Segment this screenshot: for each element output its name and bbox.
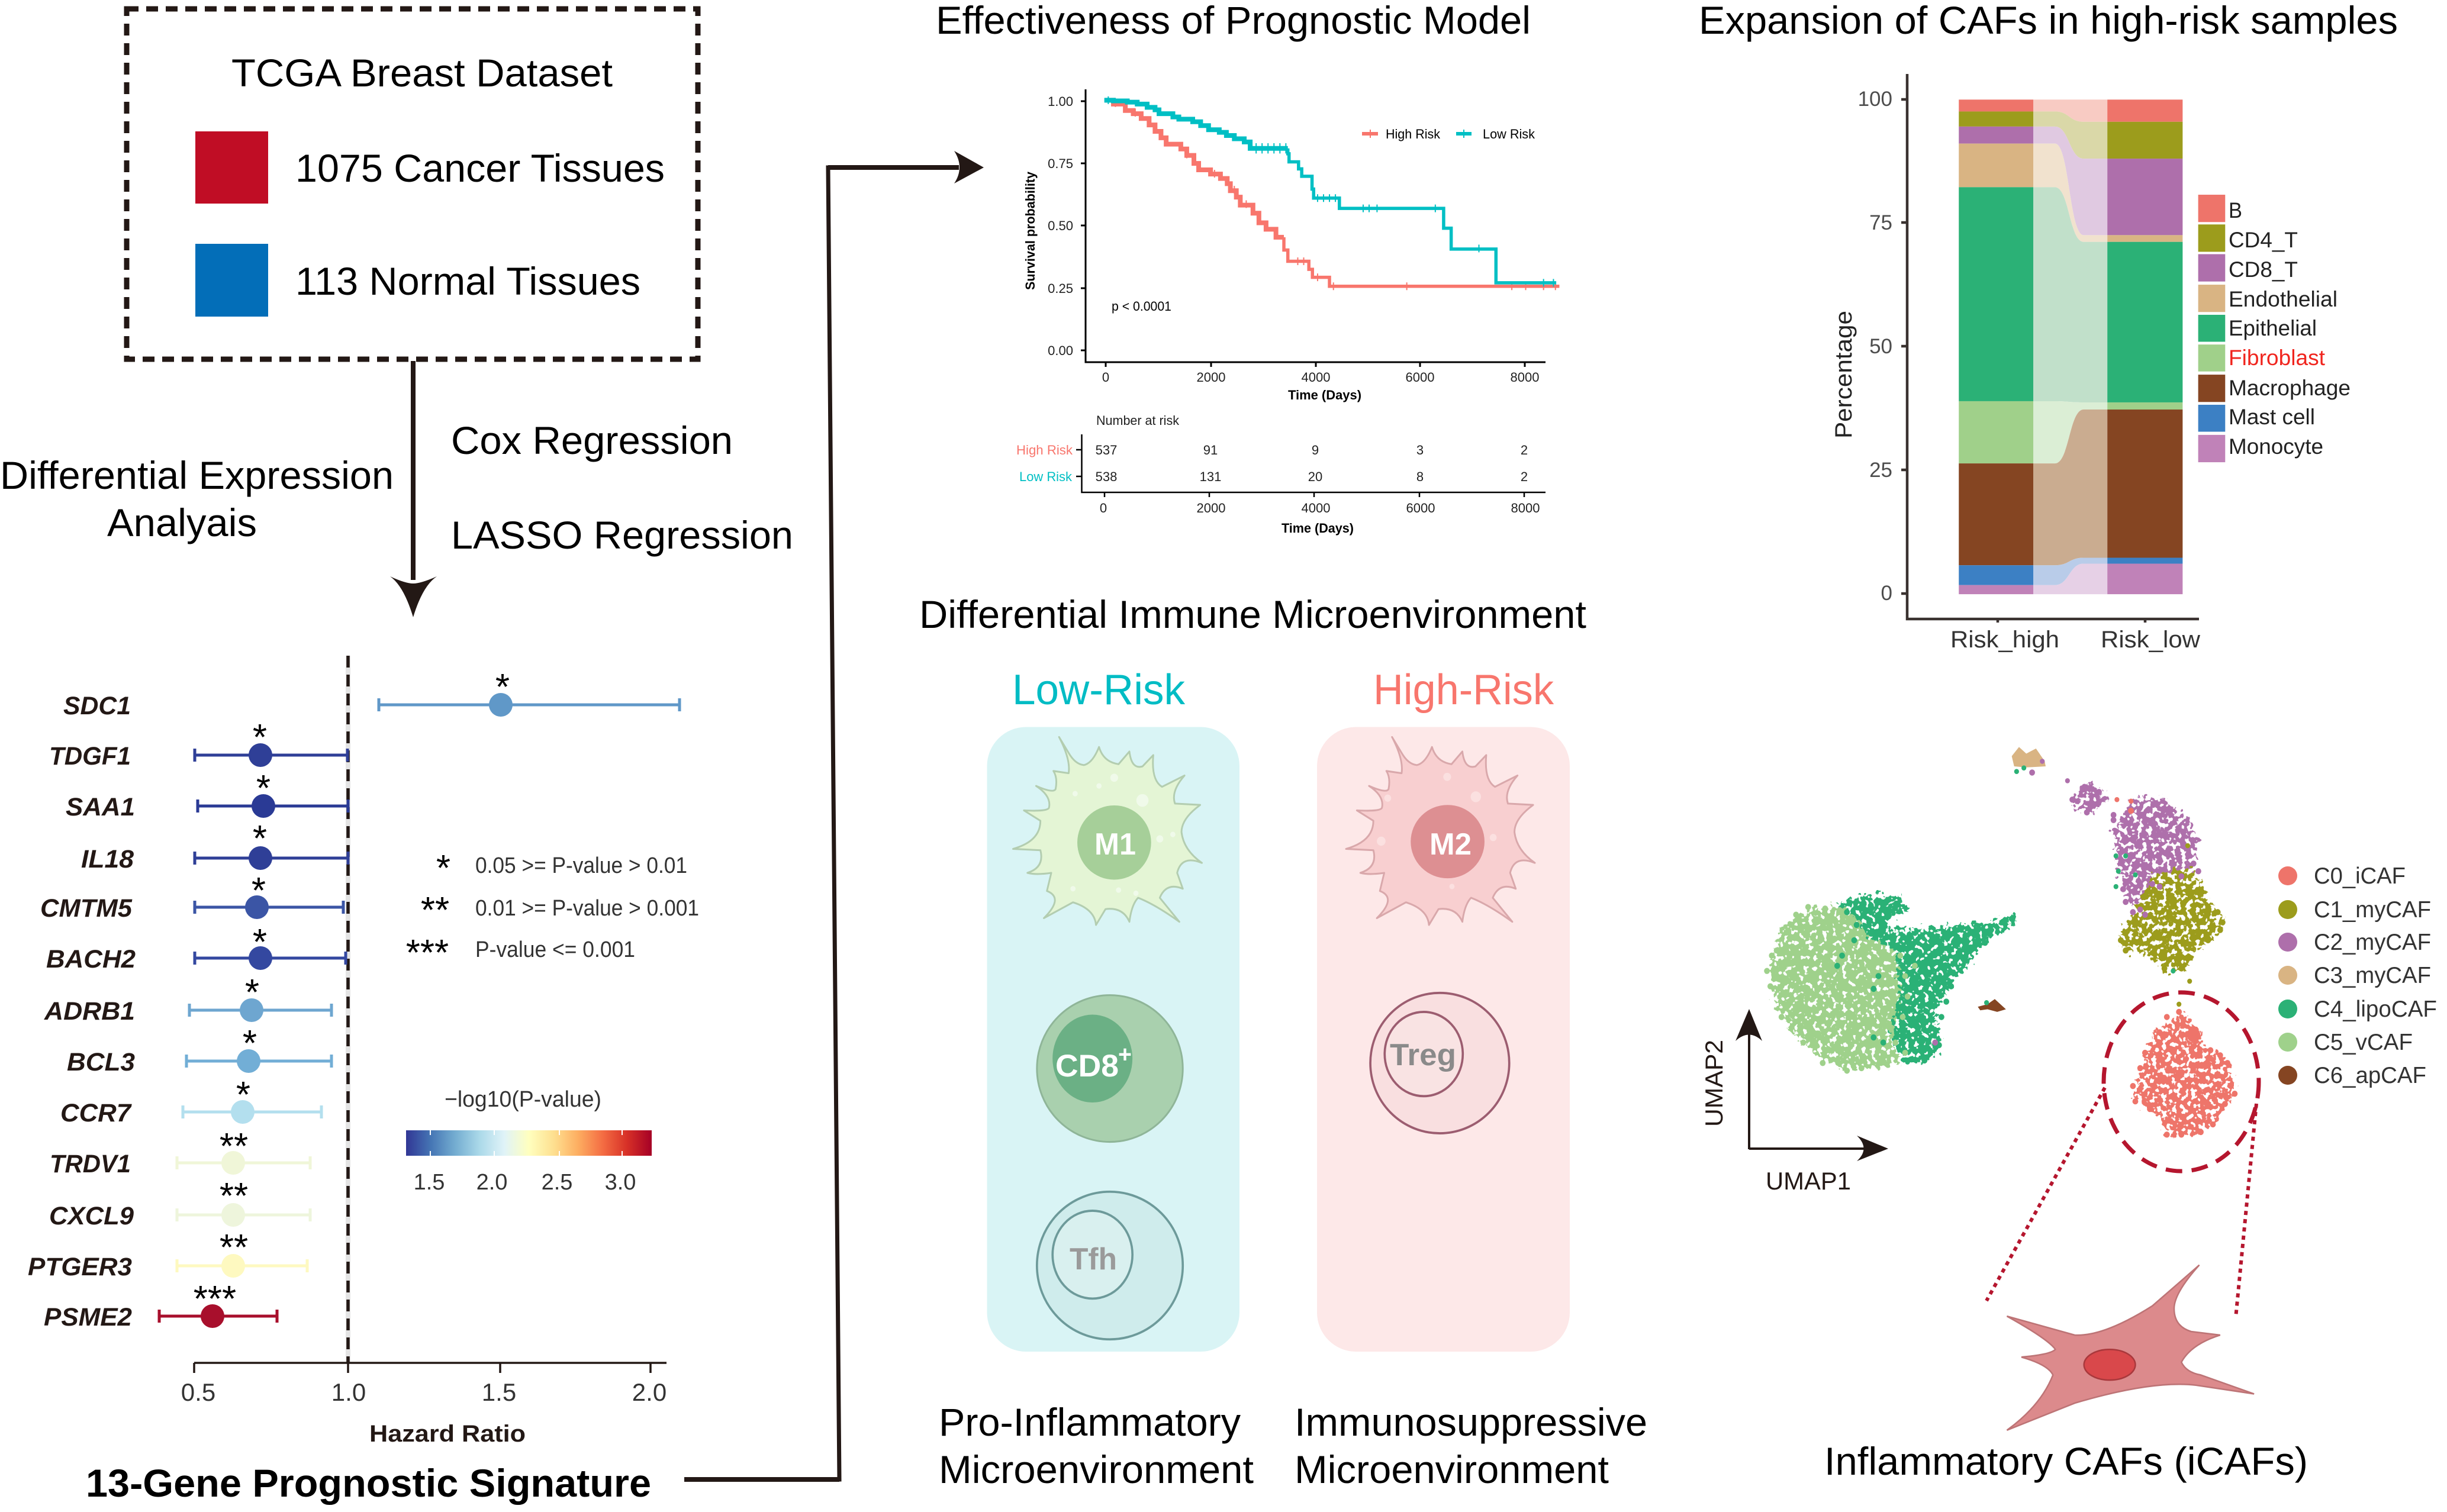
forest row: IL18: IL18 <box>81 845 134 873</box>
forest row: PSME2: *** <box>194 1279 236 1320</box>
table: number at risk: Number at risk <box>1096 413 1180 428</box>
text: immunosuppressive microenvironment: Microenvironment <box>1295 1447 1609 1491</box>
composition x labels: Risk_high <box>1950 627 2059 653</box>
forest row: ADRB1 <box>44 972 331 1026</box>
forest row: PTGER3 <box>28 1227 307 1281</box>
legend: p-value stars: 0.01 >= P-value > 0.001 <box>475 896 699 921</box>
panel: low-risk immune cells <box>987 727 1239 1352</box>
forest row: CXCL9 <box>49 1176 310 1230</box>
km y tick labels: 0.00 <box>1048 343 1073 358</box>
text: pro-inflammatory microenvironment: Pro-Inflammatory <box>939 1400 1241 1444</box>
km y tick labels <box>1048 94 1073 358</box>
composition y tick labels: 25 <box>1869 459 1892 482</box>
cluster C3 myCAF <box>2012 747 2046 768</box>
composition axes <box>1901 74 2199 623</box>
table: number at risk: 8 <box>1416 469 1424 484</box>
arrow: dataset to forest plot <box>390 361 437 617</box>
chart: UMAP of CAF clusters <box>1700 747 2437 1318</box>
table: number at risk: 0 <box>1100 501 1107 515</box>
text: Cox regression: Cox Regression <box>451 418 733 462</box>
table: number at risk <box>1016 413 1546 536</box>
icon: M2 macrophage <box>1346 737 1535 925</box>
legend: p-value stars: P-value <= 0.001 <box>475 937 635 962</box>
forest row: CCR7 <box>60 1075 321 1127</box>
table: number at risk: 2 <box>1521 469 1528 484</box>
text: differential expression analysis: Analyais <box>107 501 257 544</box>
table: number at risk: 2 <box>1521 443 1528 457</box>
UMAP legend: C3_myCAF <box>2314 963 2431 988</box>
legend: -log10 p-value colorbar: 2.5 <box>542 1170 572 1195</box>
composition legend labels: CD4_T <box>2229 228 2298 252</box>
cancer tissue swatch <box>195 131 268 204</box>
icon: M1 macrophage: M1 <box>1094 827 1136 862</box>
icon: M2 macrophage: M2 <box>1429 827 1472 862</box>
iCAF highlight circle <box>2104 992 2259 1171</box>
forest row: SDC1 <box>63 667 680 720</box>
table: number at risk: 131 <box>1200 469 1221 484</box>
km x tick labels: 0 <box>1102 370 1109 385</box>
km x tick labels: 6000 <box>1406 370 1434 385</box>
composition legend labels: Epithelial <box>2229 316 2317 340</box>
heading: 13-gene prognostic signature: 13-Gene Prognostic Signature <box>86 1461 651 1505</box>
forest row: ADRB1: ADRB1 <box>44 997 135 1026</box>
legend: -log10 p-value colorbar: −log10(P-value) <box>445 1087 601 1112</box>
heading: high-risk: High-Risk <box>1373 666 1554 714</box>
normal tissue swatch <box>195 244 268 317</box>
text: immunosuppressive microenvironment: Immunosuppressive <box>1295 1400 1647 1444</box>
forest row: PSME2 <box>44 1279 277 1332</box>
dataset title: TCGA Breast Dataset <box>231 51 613 95</box>
forest row: CXCL9: ** <box>220 1176 248 1217</box>
composition y tick labels: 0 <box>1881 582 1892 605</box>
composition legend labels: CD8_T <box>2229 257 2298 282</box>
legend: -log10 p-value colorbar: 1.5 <box>414 1170 445 1195</box>
forest row: TDGF1 <box>49 717 347 770</box>
icon: Treg cell: Treg <box>1390 1038 1456 1072</box>
panel: high-risk immune cells <box>1317 727 1570 1352</box>
forest row: CCR7: CCR7 <box>60 1099 132 1127</box>
dotted zoom lines <box>1986 1088 2256 1318</box>
text: inflammatory CAFs: Inflammatory CAFs (iCAFs) <box>1824 1439 2308 1483</box>
icon: CD8+ T cell: + <box>1118 1042 1132 1068</box>
text: immunosuppressive microenvironment <box>1295 1400 1647 1491</box>
km axes <box>1081 89 1546 367</box>
icon: fibroblast cell <box>2007 1265 2254 1430</box>
UMAP legend: C4_lipoCAF <box>2314 997 2437 1022</box>
cluster C0 iCAF <box>2133 1012 2235 1137</box>
chart: Kaplan-Meier survival curves <box>1023 89 1559 402</box>
icon: Tfh cell: Tfh <box>1070 1242 1117 1276</box>
table: number at risk: 538 <box>1096 469 1117 484</box>
table: number at risk: 91 <box>1203 443 1218 457</box>
icon: CD8+ T cell <box>1037 995 1183 1142</box>
composition y tick labels: 100 <box>1858 88 1892 111</box>
text: differential expression analysis: Differential Expression <box>0 453 394 497</box>
legend: p-value stars: * <box>436 848 450 889</box>
forest row: CMTM5: * <box>252 871 266 911</box>
hazard ratio axis: 0.5 <box>181 1378 215 1406</box>
icon: M1 macrophage <box>1013 737 1202 925</box>
normal tissue label: 113 Normal Tissues <box>295 259 640 303</box>
chart: stacked alluvial cell composition <box>1831 74 2351 653</box>
composition legend labels: Endothelial <box>2229 287 2337 311</box>
composition y tick labels <box>1858 88 1892 605</box>
table: number at risk: 4000 <box>1302 501 1330 515</box>
km curves <box>1105 96 1559 290</box>
table: number at risk: 8000 <box>1511 501 1540 515</box>
forest row: BACH2 <box>46 922 346 973</box>
forest row: CMTM5: CMTM5 <box>40 894 133 923</box>
forest row: SAA1: * <box>256 768 271 809</box>
composition legend labels: Mast cell <box>2229 405 2315 429</box>
composition y tick labels: 50 <box>1869 335 1892 358</box>
forest row: TRDV1 <box>50 1126 310 1178</box>
UMAP legend: C1_myCAF <box>2314 897 2431 923</box>
UMAP legend: C6_apCAF <box>2314 1063 2426 1088</box>
km x axis title: Time (Days) <box>1288 388 1361 402</box>
cluster C5 vCAF <box>1769 904 1900 1068</box>
forest row: CCR7: * <box>236 1075 250 1116</box>
UMAP legend: C2_myCAF <box>2314 930 2431 955</box>
forest row: SDC1: SDC1 <box>63 692 131 720</box>
UMAP axes arrows <box>1736 1009 1888 1161</box>
heading: low-risk: Low-Risk <box>1012 666 1186 714</box>
table: number at risk: 9 <box>1312 443 1319 457</box>
km y tick labels: 1.00 <box>1048 94 1073 109</box>
composition legend labels: B <box>2229 198 2242 223</box>
forest row: TDGF1: * <box>253 717 267 758</box>
composition legend labels: Monocyte <box>2229 434 2323 459</box>
UMAP legend <box>2278 863 2437 1088</box>
forest row: SDC1: * <box>495 667 510 708</box>
forest row: BCL3: * <box>243 1023 257 1064</box>
forest row: PTGER3: ** <box>220 1227 248 1268</box>
km x tick labels: 2000 <box>1197 370 1225 385</box>
legend swatches <box>2198 195 2225 462</box>
km x tick labels <box>1102 370 1539 385</box>
stacked bar: Risk_low <box>2107 99 2182 594</box>
composition legend labels: Fibroblast <box>2229 346 2326 370</box>
legend: p-value stars: ** <box>421 890 449 931</box>
stacked bar: Risk_high <box>1959 99 2033 594</box>
icon: CD8+ T cell: CD8 <box>1055 1049 1119 1084</box>
cluster C2 myCAF <box>2072 783 2198 907</box>
arrow: signature to prognostic model <box>684 151 984 1482</box>
composition y tick labels: 75 <box>1869 211 1892 234</box>
alluvial flows <box>2033 99 2107 594</box>
composition legend labels: Macrophage <box>2229 376 2351 400</box>
icon: Treg cell <box>1370 993 1509 1133</box>
icon: Tfh cell <box>1037 1192 1183 1339</box>
cluster C6 apCAF <box>1978 999 2006 1012</box>
table: number at risk: Time (Days) <box>1282 521 1354 536</box>
km x tick labels: 4000 <box>1302 370 1330 385</box>
text: differential expression analysis <box>0 453 394 544</box>
legend: p-value stars: 0.05 >= P-value > 0.01 <box>475 853 687 878</box>
km legend <box>1362 127 1535 141</box>
forest row: BCL3: BCL3 <box>67 1048 135 1076</box>
table: number at risk: 6000 <box>1406 501 1435 515</box>
UMAP2 label: UMAP2 <box>1700 1040 1728 1127</box>
forest row: TRDV1: TRDV1 <box>50 1150 131 1178</box>
hazard ratio axis: 1.0 <box>331 1378 366 1406</box>
table: number at risk: 2000 <box>1197 501 1225 515</box>
hazard ratio axis: 2.0 <box>632 1378 667 1406</box>
composition legend labels <box>2229 198 2351 459</box>
forest row: IL18 <box>81 818 348 873</box>
forest row: TRDV1: ** <box>220 1126 248 1167</box>
heading: differential immune microenvironment: Differential Immune Microenvironment <box>919 592 1586 636</box>
composition x labels: Risk_low <box>2101 627 2200 653</box>
UMAP1 label: UMAP1 <box>1766 1167 1851 1195</box>
text: pro-inflammatory microenvironment: Microenvironment <box>939 1447 1254 1491</box>
legend: -log10 p-value colorbar: 3.0 <box>605 1170 636 1195</box>
UMAP legend: C5_vCAF <box>2314 1030 2413 1055</box>
panel: TCGA dataset box <box>127 9 698 359</box>
composition x labels <box>1950 627 2200 653</box>
legend: p-value stars <box>406 848 699 973</box>
hazard ratio axis <box>181 1363 667 1447</box>
chart: forest plot of hazard ratios <box>28 656 680 1447</box>
forest row: BACH2: BACH2 <box>46 945 136 973</box>
forest row: TDGF1: TDGF1 <box>49 742 131 770</box>
forest row: BCL3 <box>67 1023 331 1076</box>
forest row: PTGER3: PTGER3 <box>28 1253 132 1281</box>
forest row: CXCL9: CXCL9 <box>49 1202 134 1230</box>
forest row: BACH2: * <box>253 922 267 963</box>
UMAP legend: C0_iCAF <box>2314 863 2406 889</box>
km x tick labels: 8000 <box>1511 370 1539 385</box>
forest row: CMTM5 <box>40 871 343 923</box>
text: pro-inflammatory microenvironment <box>939 1400 1254 1491</box>
km legend: High Risk <box>1386 127 1441 141</box>
cluster C1 myCAF <box>2118 869 2225 971</box>
km y tick labels: 0.25 <box>1048 281 1073 296</box>
composition y axis title: Percentage <box>1831 311 1857 439</box>
cluster C4 lipoCAF <box>1837 894 2015 1063</box>
table: number at risk: Low Risk <box>1019 469 1073 484</box>
table: number at risk: High Risk <box>1016 443 1073 457</box>
hazard ratio axis: Hazard Ratio <box>369 1421 526 1447</box>
forest row: SAA1: SAA1 <box>66 793 135 821</box>
km y axis title: Survival probability <box>1023 171 1038 290</box>
km legend: Low Risk <box>1483 127 1535 141</box>
forest row: IL18: * <box>253 818 267 859</box>
forest row: PSME2: PSME2 <box>44 1303 132 1332</box>
forest row: ADRB1: * <box>245 972 259 1013</box>
table: number at risk: 3 <box>1416 443 1424 457</box>
km p value: p < 0.0001 <box>1112 299 1171 314</box>
legend: p-value stars: *** <box>406 933 449 973</box>
forest row: SAA1 <box>66 768 348 821</box>
table: number at risk: 20 <box>1308 469 1322 484</box>
legend: -log10 p-value colorbar: 2.0 <box>476 1170 507 1195</box>
text: LASSO regression: LASSO Regression <box>451 513 793 557</box>
km y tick labels: 0.50 <box>1048 218 1073 233</box>
cancer tissue label: 1075 Cancer Tissues <box>295 146 665 190</box>
scattered outlier dots <box>1764 759 2237 1137</box>
legend: -log10 p-value colorbar <box>406 1087 652 1195</box>
table: number at risk: 537 <box>1096 443 1117 457</box>
km y tick labels: 0.75 <box>1048 156 1073 171</box>
hazard ratio axis: 1.5 <box>482 1378 516 1406</box>
